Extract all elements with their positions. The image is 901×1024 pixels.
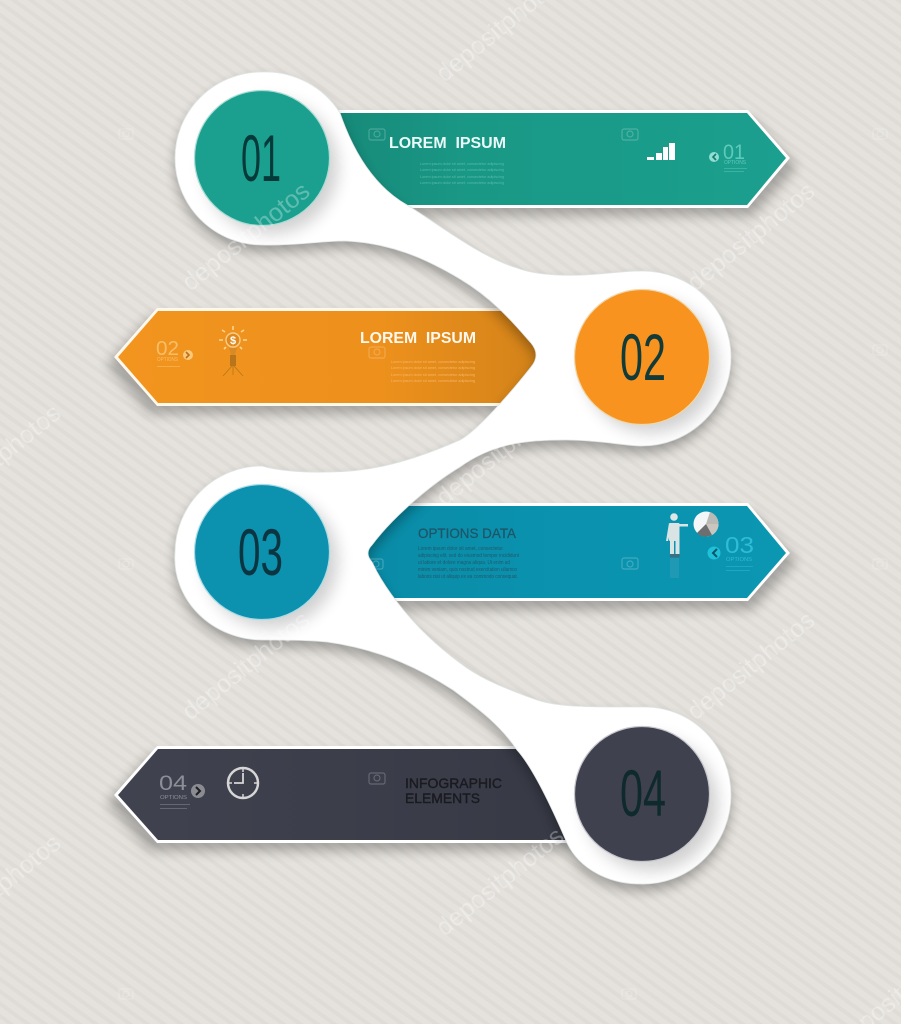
white connector shape bbox=[175, 72, 731, 884]
circle 04 bbox=[574, 726, 710, 862]
icon: clock bbox=[228, 768, 258, 798]
circle 03: 03 bbox=[238, 515, 283, 589]
label: 01 options: 01 bbox=[723, 141, 745, 164]
text block: band 02 filler: Lorem ipsum dolor sit amet, consectetur adipiscing bbox=[391, 366, 475, 370]
text block: options data body bbox=[418, 546, 519, 580]
text block: band 02 filler bbox=[391, 360, 475, 383]
band shadows bbox=[107, 118, 797, 851]
white connector shadow bbox=[175, 79, 731, 891]
text block: band 01 filler: Lorem ipsum dolor sit amet, consectetur adipiscing bbox=[420, 175, 504, 179]
circle 02: 02 bbox=[620, 320, 666, 394]
text block: band 01 filler: Lorem ipsum dolor sit amet, consectetur adipiscing bbox=[420, 162, 504, 166]
icon: back chevron 03 bbox=[708, 546, 720, 560]
label: 02 options: OPTIONS bbox=[157, 357, 179, 363]
label: 04 options: 04 bbox=[159, 772, 187, 795]
label: 03 options bbox=[725, 532, 754, 571]
icon: dollar light bulb bbox=[219, 326, 247, 376]
circle 01 bbox=[194, 90, 330, 226]
text block: band 02 filler: Lorem ipsum dolor sit amet, consectetur adipiscing bbox=[391, 373, 475, 377]
icon: presenter figure bbox=[666, 513, 688, 578]
circle shadows bbox=[204, 100, 718, 871]
label: 03 options: 03 bbox=[725, 532, 754, 558]
watermark text: depositphotos bbox=[682, 177, 820, 297]
panel: band 03 blue bbox=[350, 503, 790, 601]
text block: options data body: minim veniam, quis nostrud exercitation ullamco bbox=[418, 567, 517, 573]
circle 01: 01 bbox=[241, 121, 281, 195]
icon: forward chevron 04 bbox=[191, 784, 205, 798]
panel: band 01 teal bbox=[300, 110, 790, 208]
label: 01 options: OPTIONS bbox=[724, 160, 747, 166]
heading: lorem ipsum 01: LOREM IPSUM bbox=[389, 135, 506, 152]
heading: lorem ipsum 02: LOREM IPSUM bbox=[360, 330, 476, 347]
panel: band 04 dark bbox=[114, 746, 580, 843]
text block: options data body: laboris nisi ut aliquip ex ea commodo consequat. bbox=[418, 574, 518, 580]
text block: band 02 filler: Lorem ipsum dolor sit amet, consectetur adipiscing bbox=[391, 360, 475, 364]
icon: dollar light bulb: $ bbox=[230, 335, 236, 347]
watermark text: depositphotos bbox=[431, 822, 569, 942]
heading: infographic elements: ELEMENTS bbox=[405, 790, 480, 806]
text block: band 02 filler: Lorem ipsum dolor sit amet, consectetur adipiscing bbox=[391, 379, 475, 383]
heading: infographic elements: INFOGRAPHIC bbox=[405, 775, 502, 791]
text block: options data body: ut labore et dolore magna aliqua. Ut enim ad bbox=[418, 560, 510, 566]
panel: band 02 orange bbox=[114, 308, 560, 406]
watermark text: depositphotos bbox=[431, 392, 569, 512]
text block: band 01 filler bbox=[420, 162, 504, 185]
icon: forward chevron 02 bbox=[183, 350, 193, 360]
circle 04: 04 bbox=[620, 756, 666, 830]
text block: band 01 filler: Lorem ipsum dolor sit amet, consectetur adipiscing bbox=[420, 168, 504, 172]
watermark text: depositphotos bbox=[177, 606, 315, 726]
watermark text: depositphotos bbox=[682, 606, 820, 726]
label: 02 options: 02 bbox=[156, 338, 179, 360]
heading: options data: OPTIONS DATA bbox=[418, 525, 517, 541]
label: 03 options: OPTIONS bbox=[726, 557, 752, 563]
icon: signal bars bbox=[647, 143, 675, 160]
label: 04 options: OPTIONS bbox=[160, 795, 187, 801]
circle 03 bbox=[194, 484, 330, 620]
icon: back chevron 01 bbox=[709, 152, 719, 162]
text block: band 01 filler: Lorem ipsum dolor sit amet, consectetur adipiscing bbox=[420, 181, 504, 185]
heading: infographic elements bbox=[405, 775, 502, 806]
text block: options data body: adipiscing elit, sed do eiusmod tempor incididunt bbox=[418, 553, 519, 559]
label: 04 options bbox=[159, 772, 190, 809]
circle 02 bbox=[574, 290, 710, 424]
icon: pie chart bbox=[694, 512, 719, 537]
text block: options data body: Lorem ipsum dolor sit amet, consectetur bbox=[418, 546, 503, 552]
watermark camera marks bbox=[119, 129, 887, 999]
watermark text: depositphotos bbox=[177, 177, 315, 297]
